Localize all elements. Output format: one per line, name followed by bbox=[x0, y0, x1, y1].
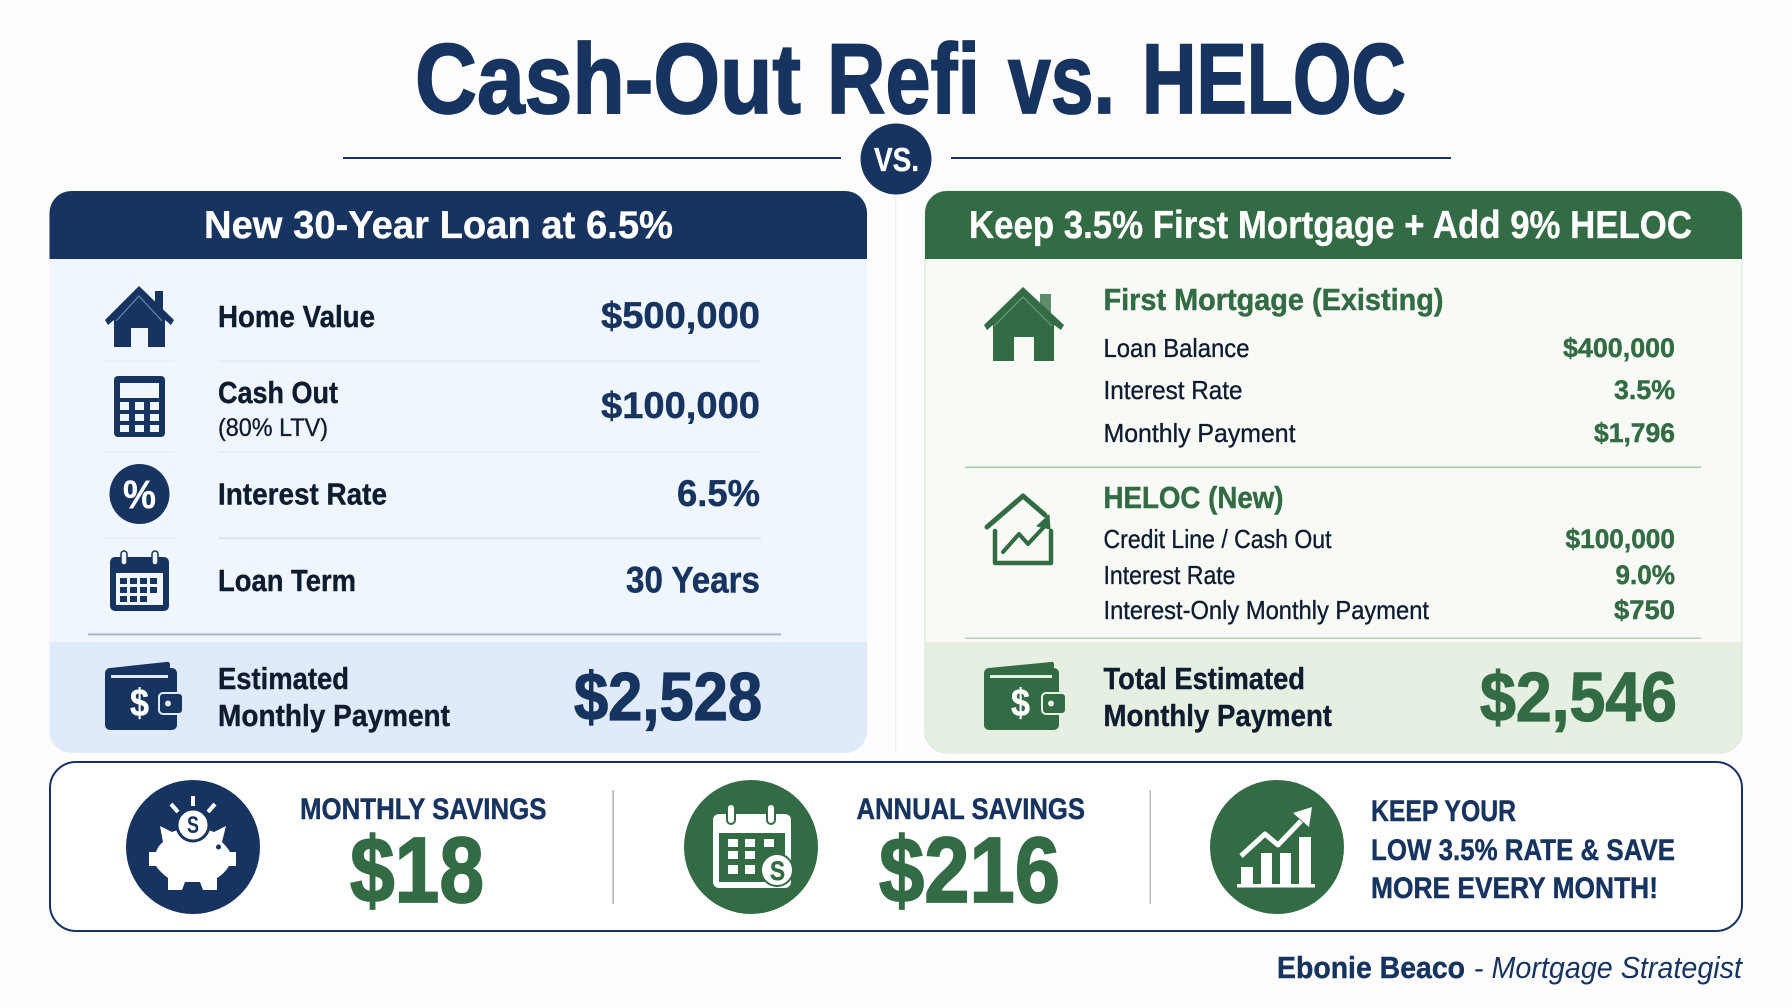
section: HELOC bbox=[1104, 480, 1675, 625]
section: first mortgage: Interest Rate bbox=[1104, 375, 1242, 405]
title: Cash-Out bbox=[415, 23, 801, 134]
section: HELOC: Interest-Only Monthly Payment bbox=[1104, 595, 1430, 625]
title divider with VS badge: VS. bbox=[874, 141, 919, 178]
author credit: Mortgage Strategist bbox=[1492, 950, 1743, 985]
right panel footer bbox=[926, 638, 1742, 753]
author credit: Ebonie Beaco bbox=[1277, 950, 1465, 985]
section: HELOC: HELOC (New) bbox=[1104, 480, 1284, 515]
callout: keep your rate: LOW 3.5% RATE & SAVE bbox=[1371, 834, 1675, 867]
icon: green wallet: $ bbox=[1011, 682, 1030, 725]
section: first mortgage: 3.5% bbox=[1614, 375, 1675, 405]
icon: wallet bbox=[105, 662, 183, 730]
row: cash out: Cash Out bbox=[218, 375, 338, 410]
section: first mortgage: Loan Balance bbox=[1104, 333, 1250, 363]
row: interest rate: 6.5% bbox=[677, 473, 760, 514]
icon: piggy bank bbox=[126, 780, 260, 914]
icon: calendar with dollar: S bbox=[770, 856, 785, 886]
row: home value bbox=[218, 295, 760, 336]
section: HELOC: 9.0% bbox=[1616, 560, 1675, 590]
section: HELOC: $100,000 bbox=[1566, 524, 1675, 554]
panel: cash-out refi bbox=[50, 191, 867, 753]
row: loan term: Loan Term bbox=[218, 563, 356, 598]
left panel footer bbox=[50, 634, 867, 753]
left panel header bbox=[50, 191, 867, 259]
section: HELOC: $750 bbox=[1614, 595, 1675, 625]
row: home value: $500,000 bbox=[601, 295, 760, 336]
row: interest rate: Interest Rate bbox=[218, 476, 387, 512]
total: total estimated monthly payment: Monthly Payment bbox=[1104, 698, 1332, 733]
icon: green wallet bbox=[984, 662, 1066, 730]
title bbox=[415, 23, 1406, 134]
row: cash out bbox=[218, 375, 760, 442]
row: loan term: 30 Years bbox=[626, 560, 760, 600]
row: cash out: $100,000 bbox=[601, 385, 760, 426]
section: first mortgage bbox=[1104, 282, 1675, 448]
icon: home with growth line bbox=[987, 496, 1051, 563]
title divider with VS badge bbox=[343, 124, 1451, 194]
stat: monthly savings: MONTHLY SAVINGS bbox=[300, 793, 546, 826]
row: home value: Home Value bbox=[218, 299, 375, 334]
stat: monthly savings bbox=[300, 793, 546, 922]
section: first mortgage: First Mortgage (Existing) bbox=[1104, 282, 1444, 317]
title: Refi bbox=[827, 23, 980, 134]
total: estimated monthly payment: $2,528 bbox=[574, 659, 762, 735]
row: interest rate bbox=[218, 473, 760, 514]
callout: keep your rate: MORE EVERY MONTH! bbox=[1371, 872, 1658, 905]
author credit bbox=[1277, 950, 1743, 985]
icon: piggy bank: S bbox=[187, 812, 199, 839]
icon: house bbox=[105, 286, 174, 347]
icon: wallet: $ bbox=[130, 682, 149, 725]
row: cash out: (80% LTV) bbox=[218, 414, 328, 442]
icon: green house bbox=[984, 287, 1064, 361]
icon: percent: % bbox=[123, 473, 156, 517]
left panel header: New 30-Year Loan at 6.5% bbox=[204, 204, 673, 247]
callout: keep your rate bbox=[1371, 795, 1675, 905]
total: estimated monthly payment: Estimated bbox=[218, 661, 349, 696]
right panel header bbox=[925, 191, 1742, 259]
author credit: - bbox=[1474, 952, 1484, 985]
panel: keep first mortgage plus HELOC bbox=[925, 191, 1742, 753]
title: vs. bbox=[1008, 23, 1115, 134]
right panel header: Keep 3.5% First Mortgage + Add 9% HELOC bbox=[969, 204, 1692, 247]
section: first mortgage: Monthly Payment bbox=[1104, 418, 1296, 448]
section: HELOC: Credit Line / Cash Out bbox=[1104, 524, 1332, 554]
icon: growth chart bbox=[1210, 780, 1344, 914]
total: estimated monthly payment: Monthly Payment bbox=[218, 698, 450, 733]
section: first mortgage: $400,000 bbox=[1563, 333, 1675, 363]
total: total estimated monthly payment bbox=[1104, 658, 1677, 736]
callout: keep your rate: KEEP YOUR bbox=[1371, 795, 1516, 828]
icon: calendar with dollar bbox=[684, 780, 818, 914]
panel: savings summary bbox=[50, 762, 1742, 931]
stat: monthly savings: $18 bbox=[350, 818, 484, 922]
icon: percent bbox=[110, 464, 170, 524]
icon: calculator bbox=[114, 376, 165, 437]
icon: calendar bbox=[110, 551, 169, 611]
stat: annual savings: ANNUAL SAVINGS bbox=[856, 793, 1085, 826]
section: HELOC: Interest Rate bbox=[1104, 560, 1236, 590]
total: estimated monthly payment bbox=[218, 659, 762, 735]
section: first mortgage: $1,796 bbox=[1594, 418, 1675, 448]
row: loan term bbox=[218, 560, 760, 600]
stat: annual savings: $216 bbox=[879, 818, 1060, 922]
title: HELOC bbox=[1142, 23, 1406, 134]
total: total estimated monthly payment: Total Estimated bbox=[1104, 661, 1305, 696]
total: total estimated monthly payment: $2,546 bbox=[1480, 658, 1677, 736]
